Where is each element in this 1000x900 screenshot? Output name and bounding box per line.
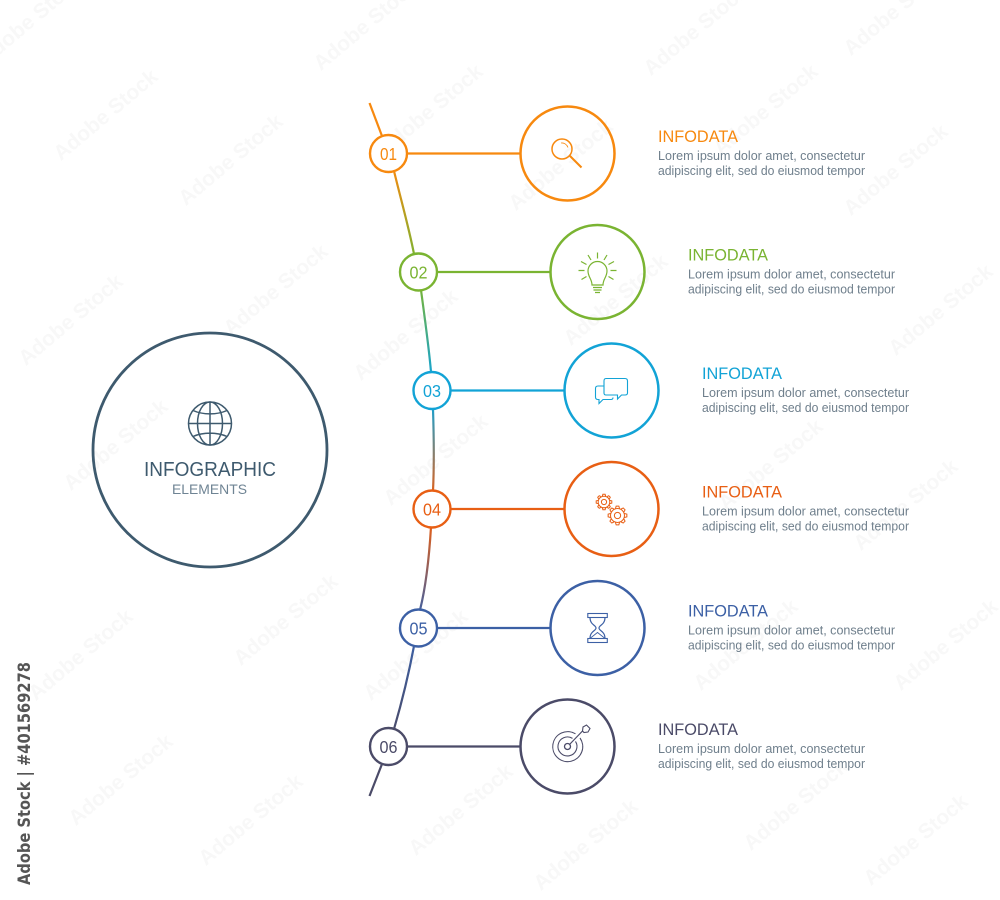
circle with speech bubbles icon [564,344,658,438]
step 02 [400,225,895,319]
badge 02: 02 [410,262,428,282]
watermark: Adobe Stock [49,65,163,165]
badge 04: 04 [423,499,441,519]
text block 02: Lorem ipsum dolor amet, consectetur [688,268,895,282]
text block 02: adipiscing elit, sed do eiusmod tempor [688,282,895,296]
badge 06: 06 [380,737,398,757]
watermark: Adobe Stock [859,790,973,890]
watermark: Adobe Stock [689,595,803,695]
watermark: Adobe Stock [174,110,288,210]
badge 02 [400,254,437,290]
badge 05: 05 [410,618,428,638]
watermark: Adobe Stock [849,455,963,555]
circle with lightbulb icon [550,225,644,319]
watermark: Adobe Stock [404,760,518,860]
subheading: elements: ELEMENTS [172,481,247,497]
watermark: Adobe Stock [359,605,473,705]
text block 03: Lorem ipsum dolor amet, consectetur [702,386,909,400]
watermark: Adobe Stock [64,730,178,830]
heading: infographic: INFOGRAPHIC [144,459,276,481]
watermark: Adobe Stock [889,595,1000,695]
watermark: Adobe Stock [529,795,643,895]
watermark: Adobe Stock [709,60,823,160]
watermark: Adobe Stock [59,395,173,495]
text block 01 [658,128,865,178]
text block 06: INFODATA [658,721,738,739]
text block 02: INFODATA [688,246,768,264]
text block 06: adipiscing elit, sed do eiusmod tempor [658,757,865,771]
text block 05: Lorem ipsum dolor amet, consectetur [688,624,895,638]
text block 05: INFODATA [688,602,768,620]
circle with target icon [520,700,614,794]
watermark: Adobe Stock [14,270,128,370]
circle with hourglass icon [550,581,644,675]
text block 02 [688,246,895,296]
watermark: Adobe Stock [504,115,618,215]
watermark: Adobe Stock [349,285,463,385]
panel: central globe circle [93,333,327,567]
watermark: Adobe Stock [194,770,308,870]
watermark: Adobe Stock [884,260,998,360]
badge 05 [400,610,437,646]
badge 04 [414,490,450,528]
icon: globe [188,402,232,445]
circle with search icon [520,106,614,200]
text block 05 [688,602,895,652]
badge 01 [370,135,407,172]
text block 01: INFODATA [658,128,738,146]
badge 06 [370,728,407,765]
watermark: Adobe Stock [374,60,488,160]
text block 06: Lorem ipsum dolor amet, consectetur [658,742,865,756]
text block 01: adipiscing elit, sed do eiusmod tempor [658,164,865,178]
badge 03: 03 [423,381,441,401]
text block 03: INFODATA [702,365,782,383]
text block 03 [702,365,909,415]
watermark: Adobe Stock [24,605,138,705]
text block 04 [702,484,909,534]
badge 01: 01 [380,144,397,164]
watermark: Adobe Stock [219,240,333,340]
text block 01: Lorem ipsum dolor amet, consectetur [658,149,865,163]
watermark: Adobe Stock [839,120,953,220]
text block 04: INFODATA [702,484,782,502]
step 06 [370,700,865,794]
text block 04: Lorem ipsum dolor amet, consectetur [702,504,909,518]
timeline spine [370,103,434,796]
step 04 [414,462,909,556]
circle with gears icon [564,462,658,556]
text block 04: adipiscing elit, sed do eiusmod tempor [702,520,909,534]
watermark: Adobe Stock [739,755,853,855]
watermark: Adobe Stock [559,250,673,350]
step 03 [414,344,909,438]
text block 06 [658,721,865,771]
stock credit: Adobe Stock | #401569278 [15,662,35,885]
text block 03: adipiscing elit, sed do eiusmod tempor [702,401,909,415]
watermark: Adobe Stock [379,410,493,510]
text block 05: adipiscing elit, sed do eiusmod tempor [688,638,895,652]
badge 03 [414,372,450,409]
step 05 [400,581,895,675]
watermark: Adobe Stock [714,415,828,515]
step 01 [370,106,865,200]
watermark: Adobe Stock [229,570,343,670]
